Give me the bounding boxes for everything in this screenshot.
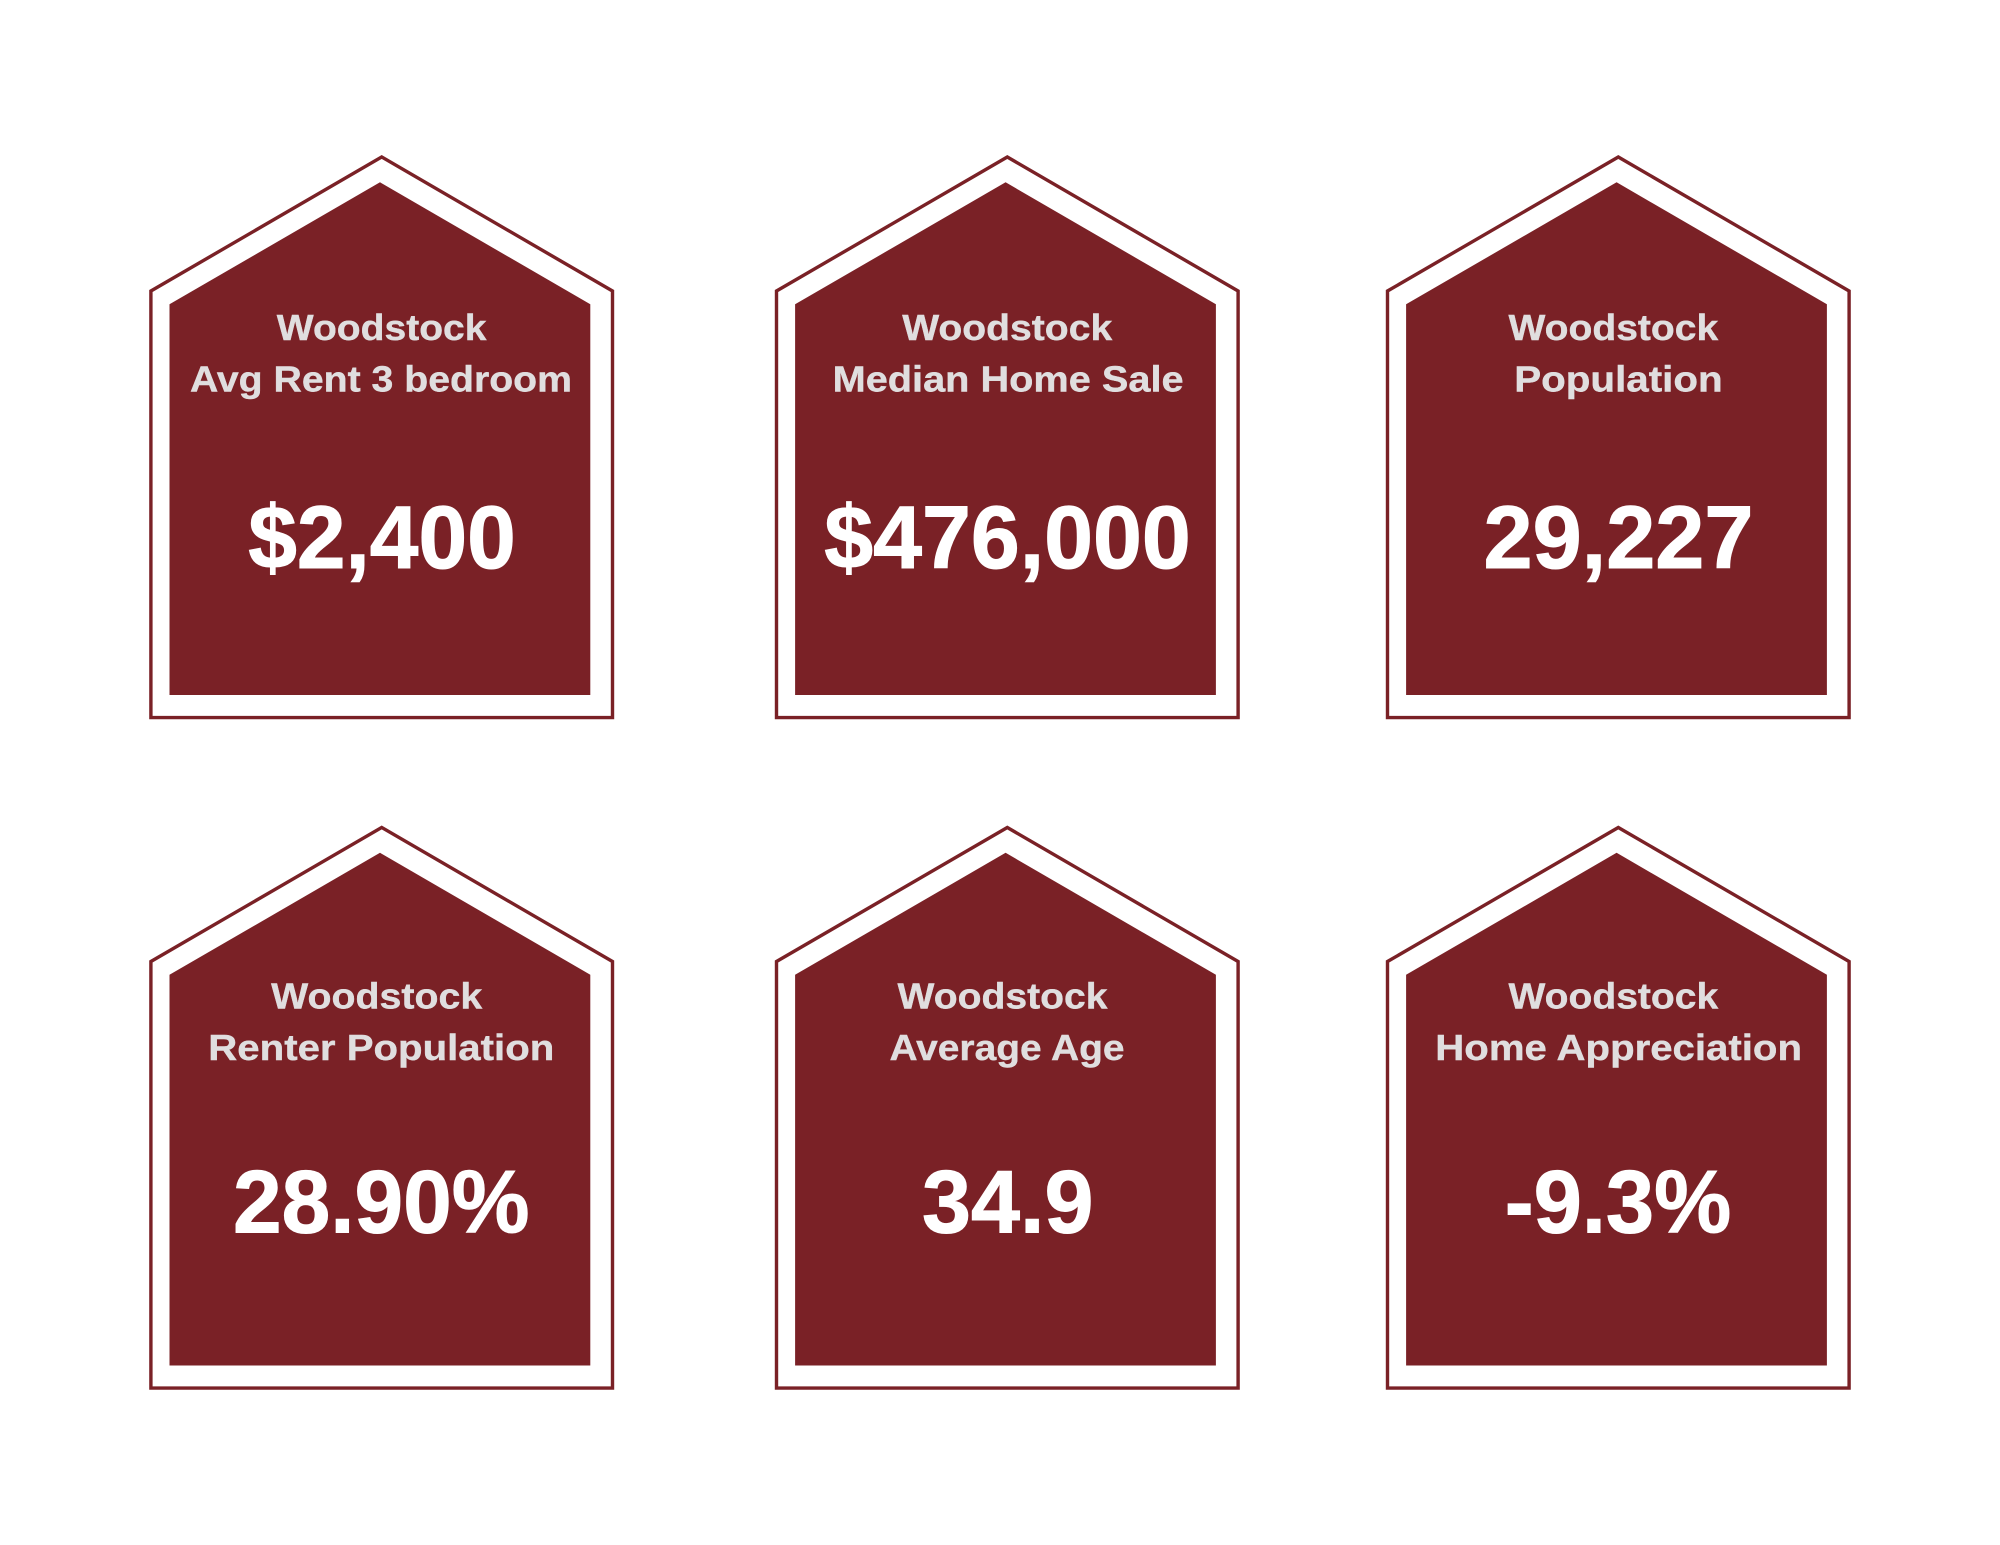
heading: Woodstock [1508,307,1719,348]
heading: Renter Population [208,1027,554,1068]
heading: Average Age [889,1027,1124,1068]
value: 34.9 [922,1152,1093,1252]
panel: Renter Population [151,828,612,1388]
house outline [151,828,612,1388]
value: 28.90% [233,1152,530,1252]
house outline [776,157,1238,718]
panel: Average Age [776,828,1238,1388]
heading: Woodstock [902,307,1113,348]
house fill [795,182,1216,695]
house fill [1406,182,1827,695]
panel: Avg Rent 3 bedroom [151,157,612,718]
heading: Woodstock [277,307,487,348]
heading: Population [1514,359,1723,400]
house outline [1388,828,1849,1388]
house fill [170,853,590,1366]
value: $2,400 [248,487,516,587]
heading: Woodstock [271,976,483,1016]
panel: Population [1388,157,1849,718]
house outline [1388,157,1849,718]
heading: Woodstock [897,976,1108,1016]
value: -9.3% [1505,1152,1731,1252]
value: 29,227 [1483,487,1754,587]
value: $476,000 [824,487,1191,587]
panel: Home Appreciation [1388,828,1849,1388]
heading: Avg Rent 3 bedroom [190,359,572,400]
panel: Median Home Sale [776,157,1238,718]
house fill [1406,853,1827,1366]
house outline [776,828,1238,1388]
heading: Home Appreciation [1435,1027,1802,1068]
heading: Woodstock [1508,976,1719,1016]
house fill [795,853,1216,1366]
house outline [151,157,612,718]
house fill [170,182,590,695]
heading: Median Home Sale [833,359,1184,400]
